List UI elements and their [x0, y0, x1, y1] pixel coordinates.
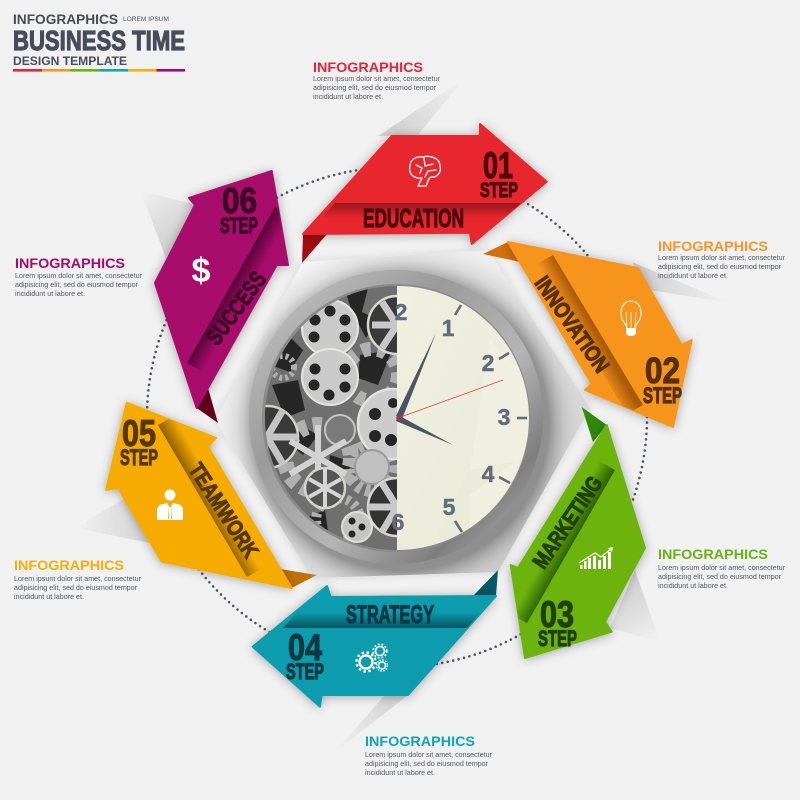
icon: light bulb: [621, 301, 641, 336]
text block: teamwork: Lorem ipsum dolor sit amet, consectetur: [14, 574, 142, 583]
fold flap: [473, 570, 498, 596]
text block: marketing: incididunt ut labore et.: [658, 581, 728, 590]
clock: [217, 253, 586, 578]
clock face right half: [397, 286, 529, 550]
step number: 06: [222, 180, 257, 221]
arrow body: [253, 586, 496, 707]
step label: STEP: [286, 659, 324, 684]
arrow body: [511, 425, 645, 658]
text block: education: [313, 59, 441, 101]
gear works left half: [265, 286, 397, 550]
text block: teamwork: INFOGRAPHICS: [14, 557, 124, 573]
arrow label: MARKETING: [527, 471, 607, 573]
hour numerals: 3: [498, 404, 510, 430]
text block: innovation: adipisicing elit, sed do eiusmod tempor: [658, 262, 782, 271]
arrow label: INNOVATION: [530, 271, 614, 377]
icon: growth chart: [579, 547, 613, 569]
step number: 03: [540, 594, 574, 635]
text block: strategy: INFOGRAPHICS: [365, 733, 475, 749]
gear: top plate: [302, 300, 358, 356]
text block: innovation: incididunt ut labore et.: [658, 271, 728, 280]
text block: marketing: INFOGRAPHICS: [658, 546, 768, 562]
step number: 01: [483, 145, 513, 186]
step number: 05: [122, 413, 156, 454]
arrow body: [508, 242, 692, 427]
text block: success: INFOGRAPHICS: [15, 255, 125, 271]
fold flap: [582, 407, 607, 442]
arrow label: SUCCESS: [201, 266, 271, 350]
arrow 03: marketing: [511, 407, 645, 658]
text block: success: [15, 255, 143, 298]
arrow 05: teamwork: [106, 403, 317, 588]
arrow label: STRATEGY: [346, 601, 434, 629]
clock halo: [217, 253, 586, 578]
text block: innovation: Lorem ipsum dolor sit amet, consectetur: [658, 253, 786, 262]
text block: education: incididunt ut labore et.: [313, 92, 383, 101]
title: infographics: INFOGRAPHICS: [13, 11, 118, 27]
arrow 04: strategy: [253, 570, 498, 707]
hour numerals: 6: [392, 509, 404, 535]
text block: strategy: adipisicing elit, sed do eiusmod tempor: [365, 759, 489, 768]
text block: success: adipisicing elit, sed do eiusmod tempor: [15, 280, 139, 289]
fold flap: [197, 388, 218, 423]
text block: strategy: [365, 733, 493, 777]
gear: bottom small: [342, 512, 372, 542]
second hand: [398, 380, 503, 418]
icon: person: [157, 490, 183, 520]
text block: teamwork: incididunt ut labore et.: [14, 592, 84, 601]
text block: education: adipisicing elit, sed do eiusmod tempor: [313, 83, 437, 92]
text block: marketing: adipisicing elit, sed do eiusmod tempor: [658, 572, 782, 581]
text block: strategy: Lorem ipsum dolor sit amet, consectetur: [365, 750, 493, 759]
dark gaps between gears: [270, 288, 392, 545]
arrow body: [106, 403, 292, 588]
text block: marketing: [658, 546, 786, 590]
arrow 01: education: [302, 124, 547, 263]
text block: education: Lorem ipsum dolor sit amet, consectetur: [313, 74, 441, 83]
step label: STEP: [220, 213, 258, 238]
text block: marketing: Lorem ipsum dolor sit amet, consectetur: [658, 563, 786, 572]
hour numerals: 2: [395, 299, 407, 325]
gear: hub: [355, 450, 389, 484]
gear: lower right spoked: [366, 476, 397, 538]
central hexagon: [215, 250, 590, 578]
text block: teamwork: adipisicing elit, sed do eiusmod tempor: [14, 583, 138, 592]
gear: centre small: [325, 415, 355, 445]
minute hand: [396, 333, 436, 419]
text block: innovation: INFOGRAPHICS: [658, 238, 768, 254]
title colour bar: [13, 69, 185, 72]
gear: large star: [288, 425, 348, 476]
text block: success: Lorem ipsum dolor sit amet, consectetur: [15, 271, 143, 280]
step label: STEP: [538, 626, 577, 651]
fold shade: [187, 207, 291, 372]
gear: lower star: [305, 468, 345, 508]
arrow body: [303, 124, 547, 244]
text block: education: INFOGRAPHICS: [313, 59, 423, 75]
fold shade: [283, 614, 479, 628]
text block: innovation: [658, 238, 786, 280]
gear background teeth: [272, 349, 398, 542]
fold shade: [537, 255, 643, 414]
title block: [13, 11, 185, 72]
text block: success: incididunt ut labore et.: [15, 289, 85, 298]
step number: 04: [288, 627, 322, 668]
icon: brain: [410, 156, 440, 186]
gear: upper right spoked: [366, 294, 397, 356]
hour numerals: 2: [482, 350, 494, 376]
arrow 06: success: [155, 171, 291, 423]
long cast shadows behind the arrows: [75, 78, 730, 752]
fold shade: [158, 416, 263, 577]
fold flap: [302, 234, 327, 263]
gear: centre right plate: [356, 388, 397, 460]
hour hand: [396, 415, 453, 445]
arrow body: [155, 171, 288, 408]
face reflection: [470, 340, 528, 528]
clock rim: [249, 270, 543, 564]
clock centre: [396, 416, 400, 420]
step number: 02: [645, 350, 680, 391]
title: lorem ipsum: LOREM IPSUM: [123, 16, 169, 23]
arrow label: EDUCATION: [363, 203, 464, 233]
hour numerals: 5: [443, 494, 456, 520]
title: design template: DESIGN TEMPLATE: [13, 54, 127, 68]
arrow 02: innovation: [483, 242, 692, 427]
step label: STEP: [643, 383, 682, 408]
gear: second plate: [302, 349, 358, 405]
gear: left edge spoked: [265, 404, 300, 468]
icon: gears: [356, 644, 388, 672]
dotted ring: [147, 167, 647, 667]
fold flap: [280, 569, 317, 588]
hour numerals: 4: [482, 461, 495, 487]
title: business time: BUSINESS TIME: [13, 25, 185, 56]
step label: STEP: [120, 445, 158, 470]
fold flap: [483, 242, 520, 262]
hour numerals: 1: [442, 315, 455, 341]
text block: teamwork: [14, 557, 142, 601]
hour ticks: [455, 305, 527, 532]
fold shade: [511, 461, 615, 623]
hour numerals: [392, 299, 510, 535]
arrow label: TEAMWORK: [184, 458, 264, 562]
step label: STEP: [480, 179, 518, 202]
fold shade: [324, 203, 521, 216]
icon: dollar: $: [192, 252, 211, 290]
text block: strategy: incididunt ut labore et.: [365, 768, 435, 777]
